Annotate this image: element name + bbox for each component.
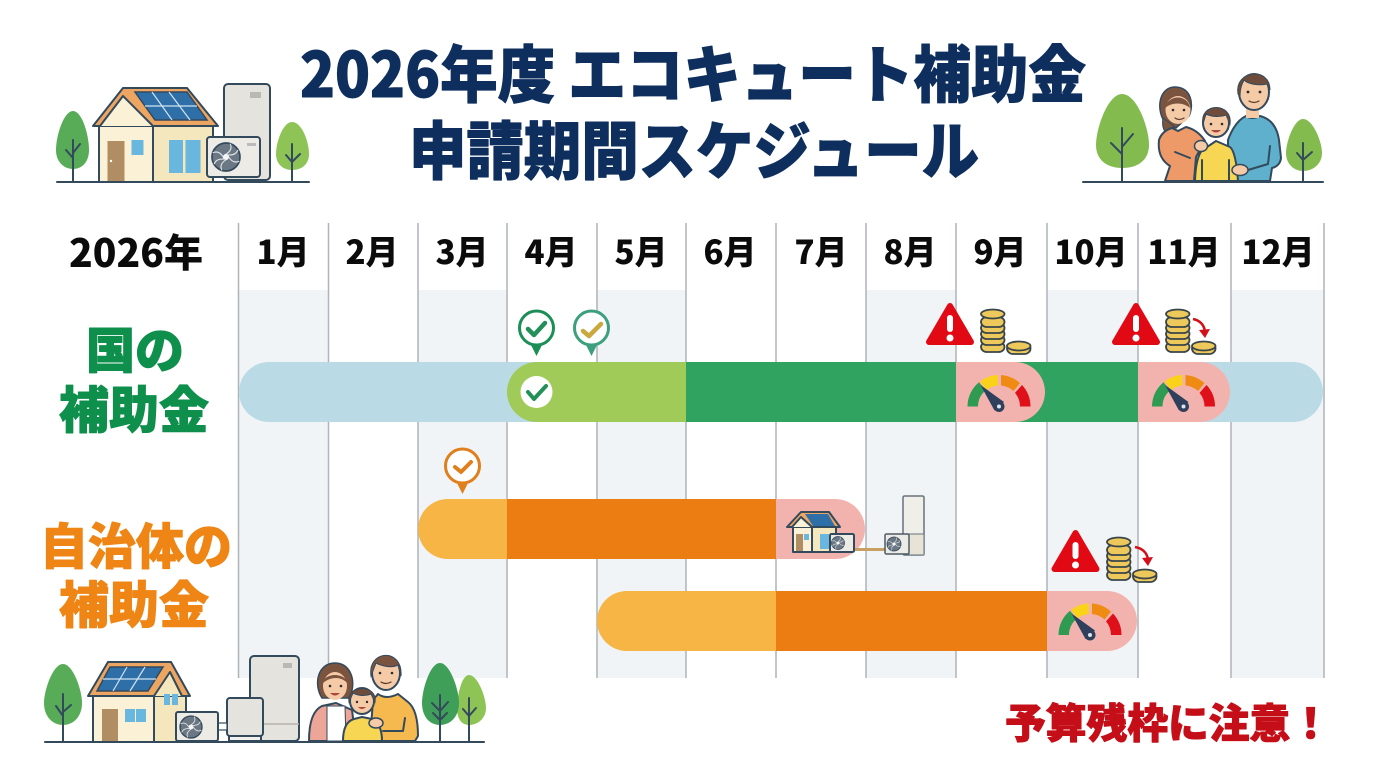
month header: 10月: [1054, 226, 1128, 274]
warning: national September: [929, 306, 971, 342]
national subsidy bar: [239, 362, 1323, 422]
month header: 11月: [1147, 226, 1221, 274]
month header: 2月: [345, 226, 399, 274]
row label: national subsidy: 国の: [86, 312, 184, 383]
warning: municipal October: [1054, 533, 1096, 569]
coins: national September: [981, 310, 1030, 354]
title: 申請期間スケジュール: [409, 102, 979, 193]
month header: 2026年: [69, 223, 203, 279]
pin: national second check: [574, 311, 608, 356]
month header: 12月: [1241, 226, 1315, 274]
warning: national November: [1115, 306, 1157, 342]
month header: 1月: [256, 226, 310, 274]
month header: 6月: [703, 226, 757, 274]
pin: municipal start check: [446, 449, 480, 494]
month header: 9月: [973, 226, 1027, 274]
month header: 4月: [524, 226, 578, 274]
month header: 3月: [435, 226, 489, 274]
illustration: bottom house, water heater and family: [44, 655, 486, 742]
row label: municipal subsidy: 自治体の: [40, 508, 232, 579]
municipal bar 2: [597, 591, 1137, 651]
gauge: municipal October: [1058, 604, 1122, 640]
month header: 7月: [794, 226, 848, 274]
gauge: national November: [1152, 375, 1215, 412]
pin: national start check: [520, 311, 554, 356]
coins with arrow: municipal October: [1107, 538, 1156, 582]
month header: [69, 223, 1315, 279]
coins with arrow: national November: [1166, 310, 1216, 354]
title: 2026年度 エコキュート補助金: [300, 25, 1086, 115]
illustration: family with trees: [1083, 74, 1323, 182]
illustration: house with solar panels and water heater: [56, 84, 309, 182]
municipal bar 1: [418, 499, 865, 559]
month header: 5月: [614, 226, 668, 274]
callout: budget warning: 予算残枠に注意！: [1005, 690, 1331, 750]
timeline column shading: [238, 290, 1324, 678]
row label: municipal subsidy: 補助金: [59, 566, 209, 638]
month header: 8月: [883, 226, 937, 274]
icon: mini house and heat pump: [787, 496, 924, 555]
title: [300, 25, 1086, 193]
gauge: national September: [968, 375, 1030, 412]
row label: municipal subsidy: [40, 508, 232, 638]
row label: national subsidy: 補助金: [59, 371, 209, 443]
row label: national subsidy: [59, 312, 209, 443]
